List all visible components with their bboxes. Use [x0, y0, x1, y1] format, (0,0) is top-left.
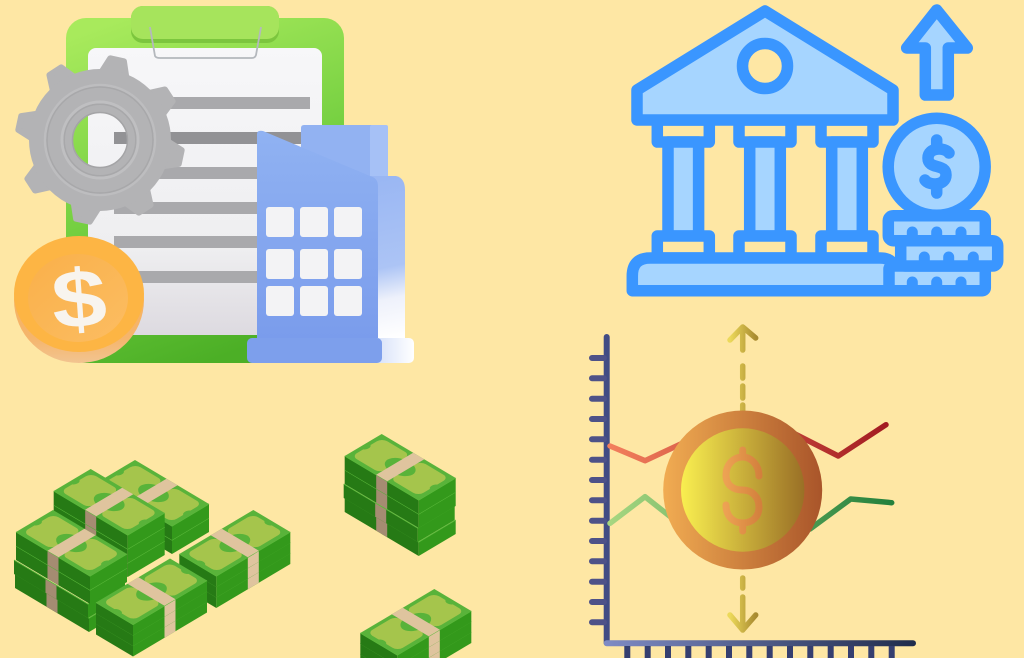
- cash stack top right: [344, 434, 456, 556]
- coin stack: [888, 216, 998, 291]
- bank pediment: [637, 11, 893, 120]
- x axis ticks: [627, 646, 892, 658]
- chart axes: [607, 337, 913, 643]
- cash stack back: [98, 460, 209, 554]
- panel: clipboard with gear, coin and building: [14, 6, 414, 363]
- clipboard clip: [131, 6, 279, 43]
- clipboard board: [66, 18, 344, 363]
- bank platform: [632, 258, 892, 291]
- cash stack upper: [54, 469, 165, 577]
- document text lines: [114, 97, 310, 283]
- cash stack right: [179, 510, 290, 608]
- red trend line: [610, 425, 886, 461]
- panel: bank with rising coins: [632, 10, 998, 291]
- arrow up dashed: [730, 327, 756, 412]
- arrow up: [907, 10, 967, 95]
- icon: office building: [247, 125, 414, 363]
- green trend line: [610, 497, 892, 529]
- pediment circle: [742, 44, 788, 88]
- building windows: [266, 207, 362, 316]
- building base: [247, 338, 414, 363]
- arrow down dashed: [730, 578, 756, 630]
- clip wire: [150, 27, 261, 58]
- icon: gold coin: [14, 236, 144, 363]
- paper sheet: [88, 48, 322, 335]
- panel: price chart with coin: [592, 327, 913, 658]
- bank columns: [657, 120, 873, 258]
- coin: [663, 410, 822, 570]
- coin with dollar: [888, 118, 985, 215]
- cash stack bottom right: [360, 589, 471, 658]
- panel: cash stack cluster: [14, 460, 290, 656]
- cash stack front: [96, 558, 207, 656]
- icon: gear: [17, 57, 183, 223]
- y axis ticks: [592, 358, 604, 622]
- cash stack left: [14, 510, 127, 632]
- dollar sign: $: [49, 252, 110, 347]
